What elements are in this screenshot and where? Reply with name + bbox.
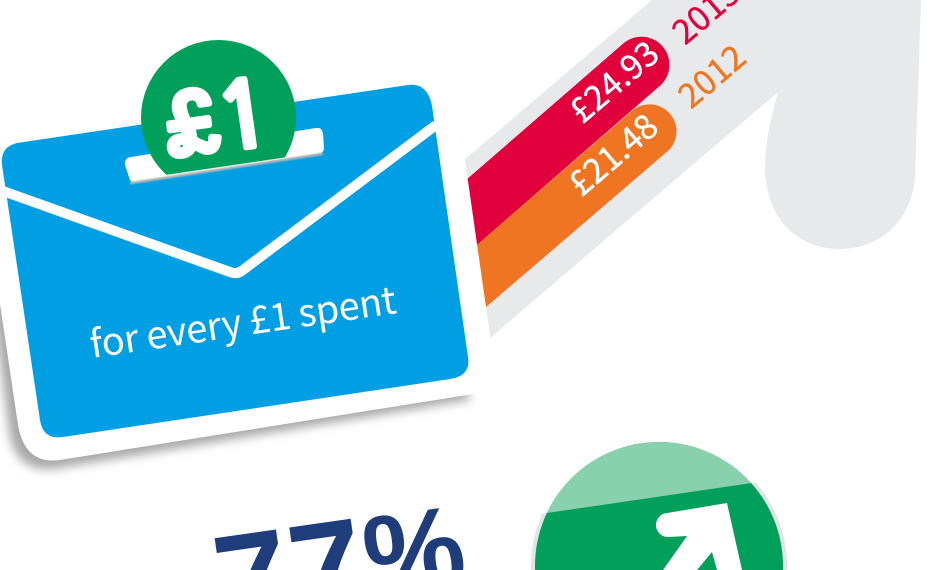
- coin: £1: [155, 68, 273, 173]
- grey growth arrow: [464, 0, 921, 338]
- green circle icon: [531, 442, 787, 570]
- bar: 2013 value: [466, 28, 669, 245]
- label: 2012: 2012: [666, 31, 755, 118]
- slot shadow: [131, 154, 322, 183]
- caption: for every £1 spent: [86, 269, 399, 369]
- coin: [141, 40, 296, 175]
- envelope flap line: [0, 125, 436, 273]
- envelope shadow: [0, 285, 470, 469]
- bar: 2012 value: [477, 101, 676, 308]
- coin slot: [125, 128, 324, 182]
- light green top segment: [547, 442, 751, 513]
- bar: 2012 value: £21.48: [556, 101, 667, 205]
- envelope body: [2, 85, 468, 437]
- bar: 2013 value: £24.93: [557, 28, 668, 132]
- white arrow: [656, 503, 742, 570]
- envelope card: [0, 40, 492, 461]
